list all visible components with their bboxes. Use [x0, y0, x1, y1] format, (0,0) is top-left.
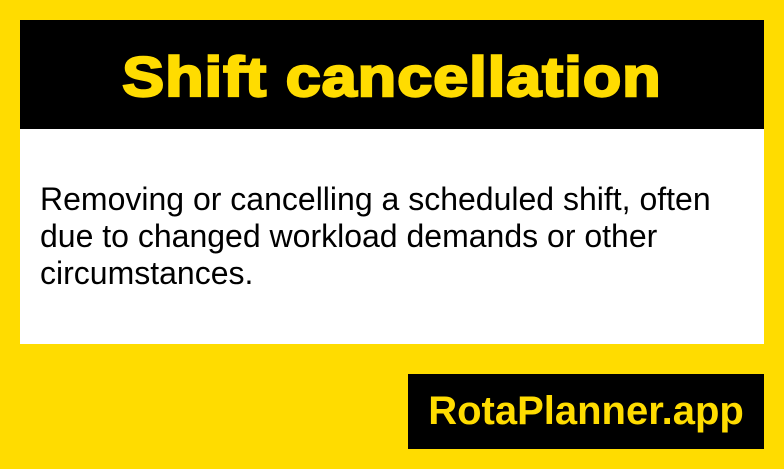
brand badge [408, 374, 764, 449]
brand name: RotaPlanner.app [428, 389, 744, 433]
definition text: Removing or cancelling a scheduled shift, often [40, 181, 711, 217]
definition text: due to changed workload demands or other [40, 218, 657, 254]
title banner [20, 20, 764, 129]
definition text: circumstances. [40, 255, 253, 291]
title: Shift cancellation [122, 45, 662, 108]
definition text [40, 181, 711, 291]
panel: definition [20, 129, 764, 344]
